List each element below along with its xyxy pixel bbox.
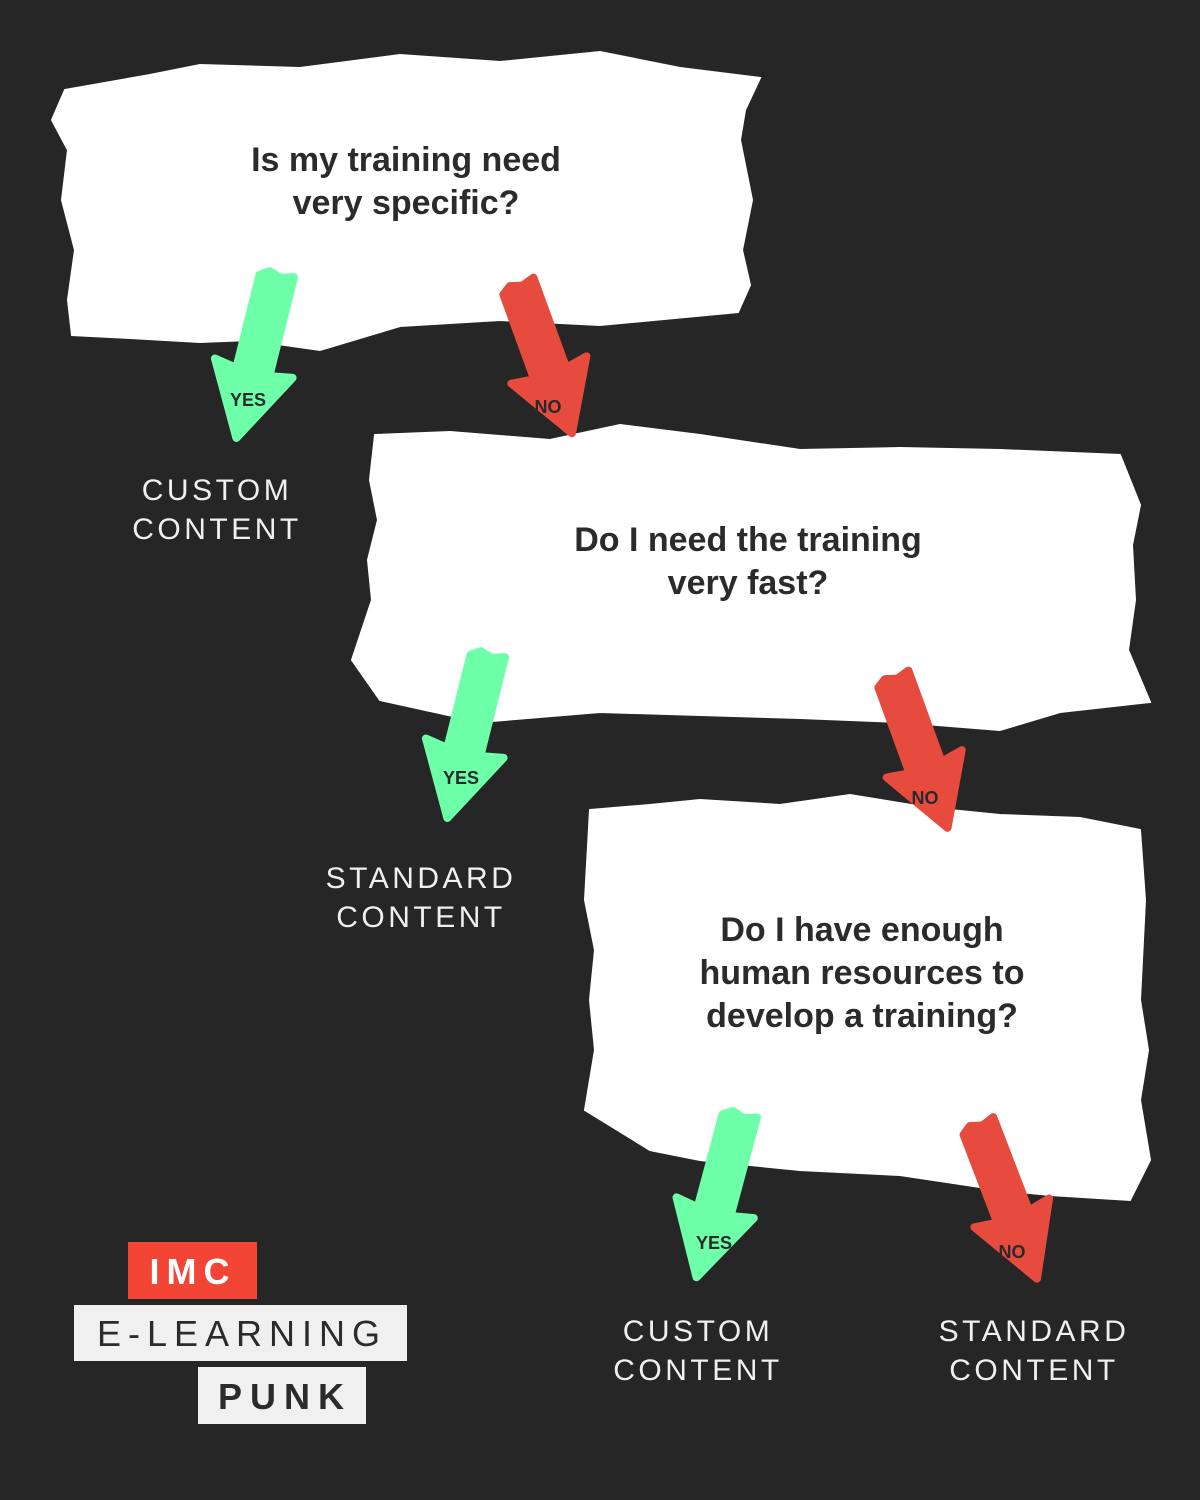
text: question 3: human resources to bbox=[700, 954, 1024, 992]
panel: question 3 bbox=[585, 795, 1150, 1200]
arrow: yes 3 bbox=[658, 1103, 779, 1288]
arrow: no 2 bbox=[855, 663, 985, 842]
arrow: yes 1 bbox=[198, 263, 316, 448]
text: question 2: Do I need the training bbox=[574, 521, 922, 559]
arrow: no 2: NO bbox=[912, 788, 938, 808]
logo bbox=[74, 1242, 407, 1424]
logo: PUNK bbox=[218, 1376, 352, 1417]
arrow: yes 2 bbox=[409, 643, 527, 828]
logo: IMC bbox=[150, 1251, 236, 1292]
panel: question 2 bbox=[352, 425, 1150, 730]
arrow: yes 2: YES bbox=[443, 768, 479, 788]
outcome: custom content 1: CUSTOM bbox=[142, 474, 292, 507]
logo: E-LEARNING bbox=[97, 1313, 387, 1354]
text: question 1: very specific? bbox=[293, 184, 519, 222]
arrow: no 1: NO bbox=[534, 397, 562, 417]
outcome: standard content 2: CONTENT bbox=[336, 901, 506, 934]
arrow: no 3 bbox=[940, 1109, 1074, 1293]
outcome: standard content 3: STANDARD bbox=[939, 1315, 1129, 1348]
arrow: no 1 bbox=[480, 270, 610, 447]
text: question 3: Do I have enough bbox=[720, 911, 1004, 949]
outcome: custom content 3: CONTENT bbox=[613, 1354, 783, 1387]
outcome: standard content 3: CONTENT bbox=[949, 1354, 1119, 1387]
outcome: custom content 3: CUSTOM bbox=[623, 1315, 773, 1348]
text: question 2: very fast? bbox=[668, 564, 828, 602]
outcome: custom content 1: CONTENT bbox=[132, 513, 302, 546]
panel: question 1 bbox=[52, 52, 760, 350]
text: question 1: Is my training need bbox=[251, 141, 561, 179]
arrow: no 3: NO bbox=[998, 1242, 1026, 1262]
outcome: standard content 2: STANDARD bbox=[326, 862, 516, 895]
arrow: yes 3: YES bbox=[696, 1233, 732, 1253]
arrow: yes 1: YES bbox=[230, 390, 266, 410]
text: question 3: develop a training? bbox=[706, 997, 1018, 1035]
